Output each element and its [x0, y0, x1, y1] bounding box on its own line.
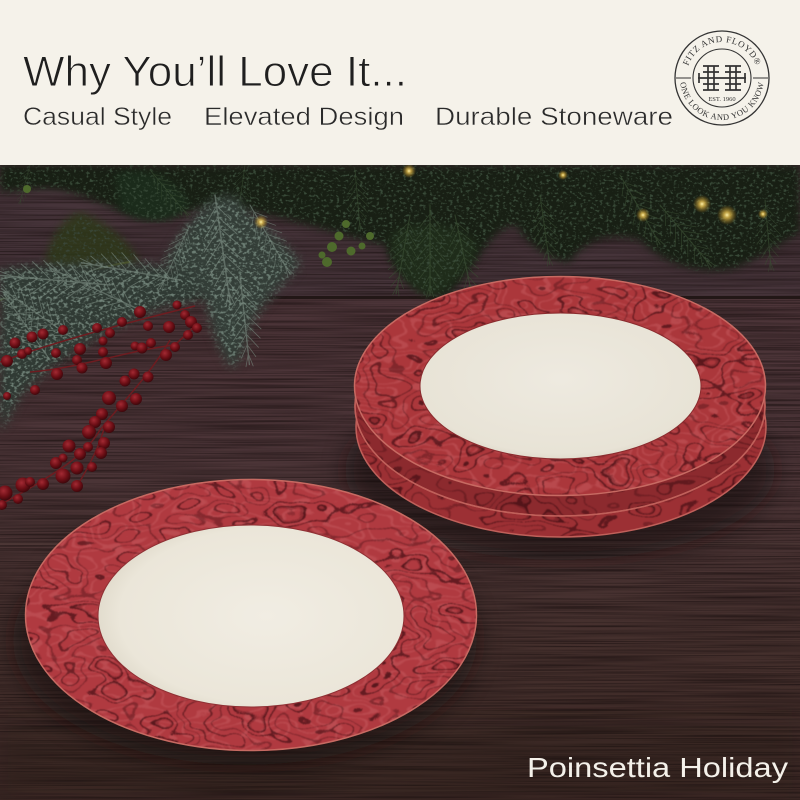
front plate: [13, 475, 482, 765]
red berries: [0, 300, 202, 510]
front plate shadow: [13, 515, 477, 765]
logo: Fitz and Floyd seal: [674, 30, 770, 126]
lower plate texture: [357, 411, 765, 536]
bottom plate: [356, 317, 766, 537]
wood table background: [0, 165, 800, 800]
top plate rim: [354, 276, 766, 496]
front plate cream well: [98, 525, 404, 707]
logo established date: EST. 1960: [708, 96, 736, 103]
feature: elevated design: Elevated Design: [204, 103, 404, 131]
feature list: [23, 103, 673, 131]
middle plate: [355, 296, 765, 516]
logo lower text: ONE LOOK AND YOU KNOW: [680, 82, 764, 120]
red berry stems: [0, 306, 197, 505]
logo upper text: FITZ AND FLOYD®: [682, 36, 760, 66]
logo monogram: [698, 66, 746, 90]
top plate cream well: [420, 313, 701, 459]
front plate rim: [25, 479, 477, 751]
stack shadow: [345, 380, 775, 560]
feature: durable stoneware: Durable Stoneware: [435, 103, 673, 131]
yellow-green cedar sprig: [0, 212, 140, 300]
feature: casual style: Casual Style: [23, 103, 172, 131]
green berries: [23, 185, 374, 267]
header band: [0, 0, 800, 165]
pine garland along the top: [0, 163, 800, 298]
string lights: [254, 164, 768, 229]
collection name caption: Poinsettia Holiday: [527, 752, 788, 783]
silver cedar branches: [0, 192, 303, 430]
top plate etched pattern: [350, 270, 770, 500]
plate stack: [345, 270, 775, 560]
front plate etched pattern: [20, 475, 482, 755]
title: Why You’ll Love It...: [23, 48, 407, 96]
